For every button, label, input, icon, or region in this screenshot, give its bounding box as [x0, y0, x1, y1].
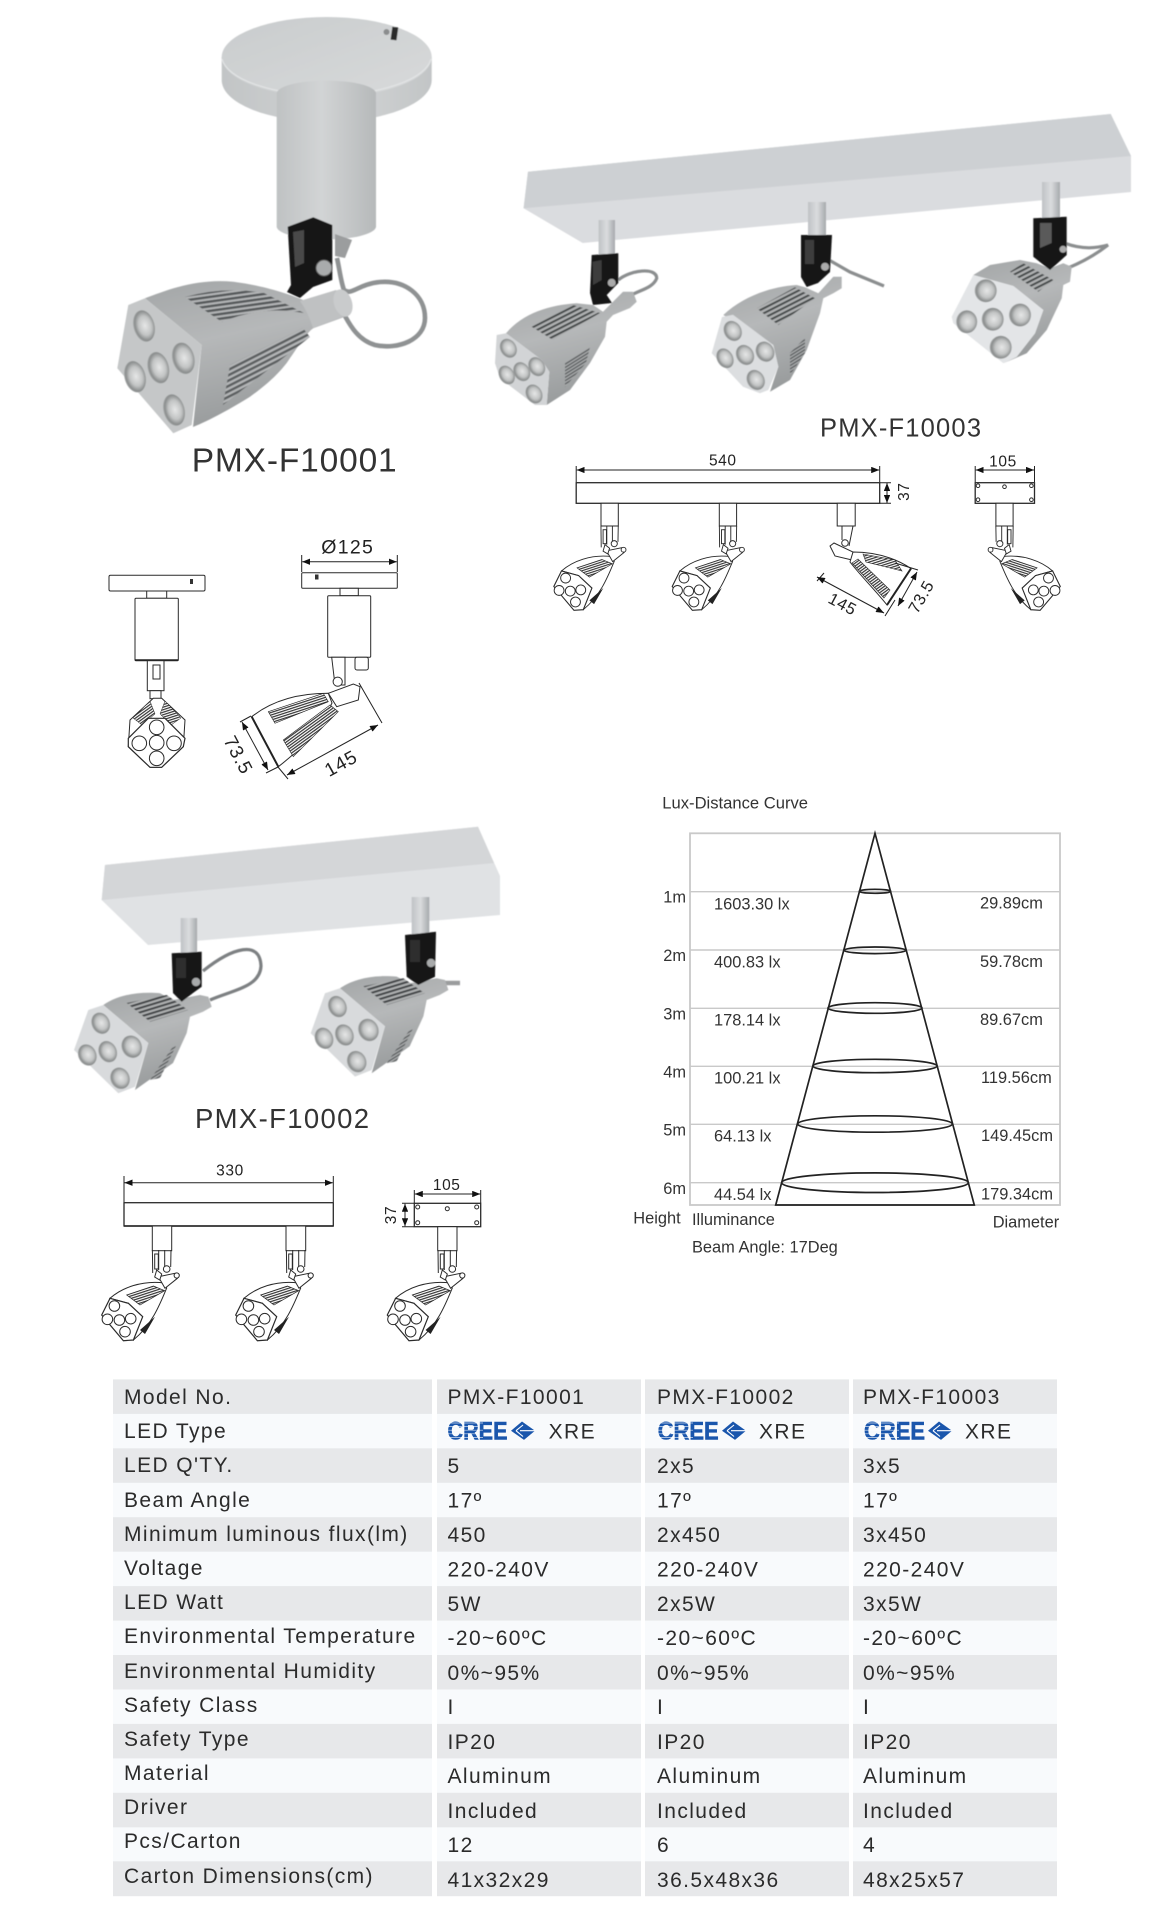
illuminance values: 1603.30 lx: [714, 895, 790, 913]
side view head with dimensions 145 and 73.5: [817, 526, 938, 619]
table: specifications: [113, 1379, 1057, 1896]
drawing: F10003 side view with dimension 105: [975, 454, 1060, 610]
row: Voltage: 220-240V: [448, 1558, 550, 1582]
row: LED Type: XRE: [965, 1420, 1012, 1444]
chart frame: [690, 833, 1060, 1205]
row: Material: Aluminum: [863, 1765, 968, 1788]
heading: PMX-F10001: PMX-F10001: [192, 443, 397, 480]
row: LED Watt: 2x5W: [657, 1593, 716, 1616]
row: Pcs/Carton: Pcs/Carton: [124, 1830, 242, 1853]
CREE logo column 1: CREE: [448, 1418, 508, 1446]
row: Carton Dimensions: 48x25x57: [863, 1869, 965, 1892]
chart title: Lux-Distance Curve: [662, 793, 808, 812]
drawing: F10001 side view with dimensions: [219, 536, 397, 782]
row: LED QTY: 5: [448, 1455, 461, 1478]
height labels: 4m: [663, 1063, 686, 1081]
drawing: F10002 front view with dimension 330: 330: [216, 1163, 244, 1180]
row: Material: [113, 1758, 1057, 1793]
lamp head: [117, 281, 356, 433]
row: Environmental Temperature: Environmental Temperature: [124, 1625, 417, 1648]
row: Minimum luminous flux: 450: [448, 1524, 487, 1547]
row: Beam Angle: 17º: [657, 1490, 692, 1512]
cylinder: [277, 81, 376, 239]
dimension 145: [278, 683, 382, 782]
row: Environmental Temperature: -20~60ºC: [863, 1627, 963, 1650]
beam cone: [776, 833, 974, 1205]
row: Environmental Humidity: [113, 1655, 1057, 1690]
left head: [74, 993, 212, 1093]
diameter values: [980, 895, 1053, 1204]
row: LED Watt: [113, 1586, 1057, 1621]
row: Model No.: PMX-F10003: [863, 1386, 1001, 1409]
row: Carton Dimensions: 41x32x29: [448, 1869, 550, 1892]
diameter values: 89.67cm: [980, 1011, 1043, 1029]
chart: Lux-Distance Curve: [633, 793, 1060, 1256]
row: Beam Angle: [113, 1483, 1057, 1518]
row: Safety Class: Safety Class: [124, 1694, 259, 1717]
row: Safety Class: I: [863, 1696, 870, 1719]
row: Carton Dimensions: 36.5x48x36: [657, 1869, 780, 1892]
heading: PMX-F10002: PMX-F10002: [195, 1103, 369, 1134]
row: Material: Aluminum: [448, 1765, 552, 1788]
axis captions: Diameter: [993, 1213, 1060, 1231]
CREE logo column 2: CREE: [658, 1418, 719, 1446]
row: Environmental Temperature: -20~60ºC: [657, 1627, 757, 1650]
axis captions: [633, 1209, 1060, 1256]
row: Model No.: Model No.: [124, 1386, 232, 1409]
row: Beam Angle: 17º: [863, 1490, 898, 1512]
row: Model No.: PMX-F10002: [657, 1386, 795, 1409]
drawing: F10002 side view with dimensions 105 and 37: 105: [433, 1177, 461, 1194]
row: Model No.: [113, 1379, 1057, 1414]
row: Environmental Humidity: 0%~95%: [657, 1662, 750, 1685]
row: LED QTY: LED Q'TY.: [124, 1454, 234, 1477]
cable loop: [203, 949, 261, 1000]
side view head with dimensions 145 and 73.5: 145: [825, 590, 860, 619]
row: LED QTY: [113, 1448, 1057, 1483]
row: Voltage: Voltage: [124, 1557, 204, 1580]
row: LED Type: [113, 1414, 1057, 1449]
row: LED Type: LED Type: [124, 1420, 227, 1443]
row: Environmental Humidity: 0%~95%: [448, 1662, 541, 1685]
stems: [599, 182, 1060, 257]
diameter values: 119.56cm: [981, 1069, 1052, 1087]
right head: [952, 260, 1072, 363]
row: Carton Dimensions: [113, 1861, 1057, 1896]
illuminance values: 400.83 lx: [714, 953, 781, 971]
drawing: F10001 front view: [109, 575, 205, 767]
pin: [433, 981, 460, 985]
drawing: F10003 side view with dimension 105: 105: [989, 454, 1017, 470]
row: LED Watt: 3x5W: [863, 1593, 922, 1616]
row: Safety Type: Safety Type: [124, 1728, 250, 1751]
diameter values: 179.34cm: [981, 1186, 1053, 1204]
axis captions: Beam Angle: 17Deg: [692, 1238, 838, 1256]
height labels: 1m: [663, 889, 686, 907]
illuminance values: [714, 895, 790, 1204]
row: Safety Type: [113, 1724, 1057, 1759]
cable loop: [337, 258, 425, 346]
black brackets: [590, 217, 1067, 305]
row: Safety Class: I: [448, 1696, 455, 1719]
height labels: [663, 889, 686, 1198]
middle head: [712, 277, 842, 393]
row: Driver: [113, 1793, 1057, 1828]
row: Pcs/Carton: [113, 1827, 1057, 1862]
row: LED Type: XRE: [759, 1420, 806, 1444]
brackets: [172, 932, 436, 1002]
dimension 37: [880, 482, 913, 503]
diameter values: 59.78cm: [980, 953, 1043, 971]
row: Environmental Temperature: [113, 1621, 1057, 1656]
row: LED QTY: 2x5: [657, 1455, 695, 1478]
row: LED QTY: 3x5: [863, 1455, 901, 1478]
drawing: F10002 side view with dimensions 105 and 37: 37: [383, 1206, 400, 1224]
bar: [576, 483, 880, 503]
side view head with dimensions 145 and 73.5: 73.5: [905, 578, 938, 617]
row: Material: Material: [124, 1762, 210, 1785]
row: Minimum luminous flux: 3x450: [863, 1524, 927, 1547]
stems: [181, 918, 197, 955]
height labels: 2m: [663, 947, 686, 965]
CREE logo column 3: CREE: [864, 1418, 925, 1446]
dimension 73.5: [219, 716, 278, 778]
row: Voltage: 220-240V: [863, 1558, 965, 1582]
dimension Ø125: [302, 536, 397, 572]
dimension 73.5: 73.5: [219, 733, 256, 778]
row: Driver: Included: [863, 1800, 954, 1823]
dimension Ø125: Ø125: [321, 536, 374, 558]
right head: [311, 976, 448, 1077]
row: Driver: Included: [657, 1800, 748, 1823]
row: LED Watt: LED Watt: [124, 1591, 224, 1614]
drawing: F10003 front view with dimensions: [554, 453, 938, 619]
drawing: F10002 front view with dimension 330: [102, 1163, 333, 1341]
row: LED Type: XRE: [549, 1420, 596, 1444]
row: Voltage: 220-240V: [657, 1558, 759, 1582]
photo: PMX-F10003 triple spotlight: [495, 114, 1131, 407]
diameter values: 29.89cm: [980, 895, 1043, 913]
row: Minimum luminous flux: 2x450: [657, 1524, 721, 1547]
row: Beam Angle: Beam Angle: [124, 1489, 251, 1512]
cables: [618, 243, 1108, 295]
heading: PMX-F10003: PMX-F10003: [820, 415, 981, 443]
height labels: 3m: [663, 1005, 686, 1023]
illuminance values: 100.21 lx: [714, 1070, 781, 1088]
row: Carton Dimensions: Carton Dimensions(cm): [124, 1865, 374, 1888]
illuminance values: 44.54 lx: [714, 1186, 772, 1204]
row: Environmental Humidity: Environmental Humidity: [124, 1660, 377, 1683]
row: Pcs/Carton: 12: [448, 1834, 474, 1857]
dimension 540: 540: [709, 453, 737, 470]
row: Safety Class: I: [657, 1696, 664, 1719]
row: Safety Type: IP20: [657, 1731, 706, 1754]
row: Safety Type: IP20: [863, 1731, 912, 1754]
row: Model No.: PMX-F10001: [448, 1386, 585, 1409]
axis captions: Illuminance: [692, 1211, 775, 1229]
row: Pcs/Carton: 6: [657, 1834, 670, 1857]
row: Environmental Temperature: -20~60ºC: [448, 1627, 548, 1650]
ceiling disc: [222, 17, 432, 122]
photo: PMX-F10001 spotlight: [117, 17, 432, 433]
row: LED Watt: 5W: [448, 1593, 482, 1616]
mounting bar: [102, 827, 500, 945]
photo: PMX-F10002 twin spotlight: [74, 827, 500, 1093]
dimension 145: 145: [321, 747, 361, 782]
row: Driver: Included: [448, 1800, 538, 1823]
row: Driver: Driver: [124, 1796, 188, 1819]
row: Voltage: [113, 1552, 1057, 1587]
row: Material: Aluminum: [657, 1765, 762, 1788]
row: Safety Type: IP20: [448, 1731, 496, 1754]
height labels: 5m: [663, 1122, 686, 1140]
drawing: F10002 side view with dimensions 105 and 37: [383, 1177, 481, 1341]
row: Minimum luminous flux: [113, 1517, 1057, 1552]
axis captions: Height: [633, 1209, 681, 1227]
height labels: 6m: [663, 1180, 686, 1198]
stems and fixtures: [601, 503, 618, 526]
illuminance values: 64.13 lx: [714, 1128, 772, 1146]
row: Minimum luminous flux: Minimum luminous flux(lm): [124, 1523, 409, 1546]
row: Beam Angle: 17º: [448, 1490, 483, 1512]
dimension 37: 37: [896, 482, 913, 501]
illuminance values: 178.14 lx: [714, 1012, 781, 1030]
row: Pcs/Carton: 4: [863, 1834, 876, 1857]
row: Safety Class: [113, 1690, 1057, 1724]
left head: [495, 292, 637, 407]
diameter values: 149.45cm: [981, 1127, 1053, 1145]
row: Environmental Humidity: 0%~95%: [863, 1662, 956, 1685]
mounting bar: [524, 114, 1131, 243]
black bracket: [287, 217, 352, 298]
